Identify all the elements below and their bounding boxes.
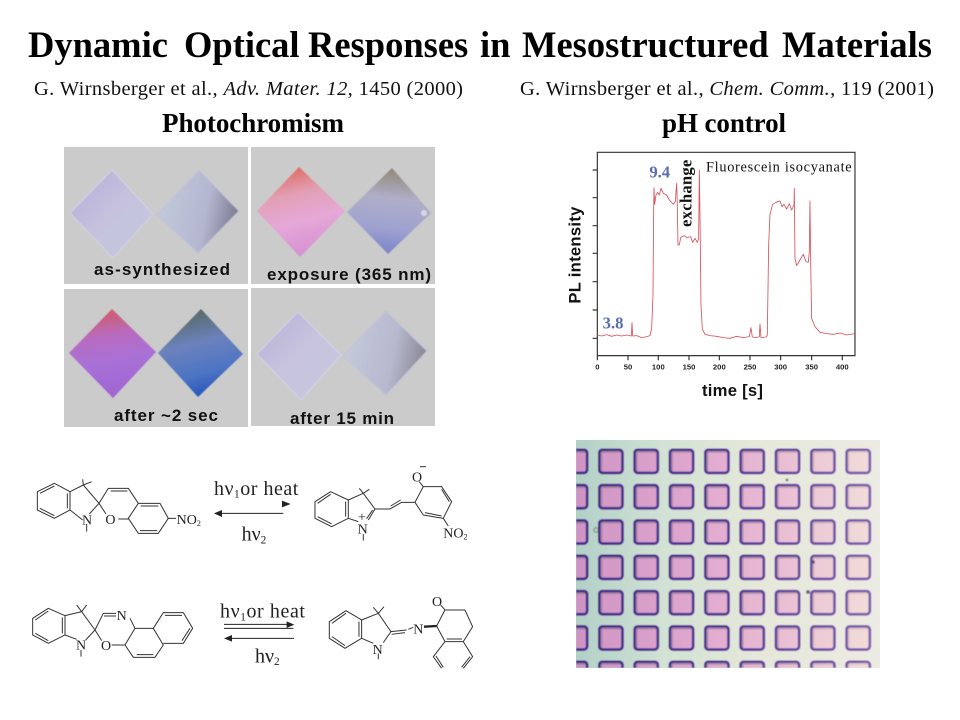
heading: Photochromism: Photochromism bbox=[162, 108, 344, 138]
panel: after 15 min bbox=[251, 288, 435, 428]
label: hv1 or heat: or heat bbox=[240, 478, 299, 500]
photo: patterned microscopy grid bbox=[570, 434, 886, 674]
title: Optical bbox=[184, 24, 300, 65]
annotation: exchange: exchange bbox=[677, 160, 696, 227]
molecule: spirooxazine: N bbox=[76, 638, 86, 653]
axis label: PL intensity: PL intensity bbox=[566, 206, 585, 304]
molecule: open form bbox=[329, 595, 473, 668]
tick labels: 150 bbox=[683, 362, 695, 371]
molecule: merocyanine: 2 bbox=[463, 532, 467, 541]
chemistry: reactions bbox=[33, 467, 473, 668]
arrows: reaction 2 bbox=[224, 621, 294, 642]
citation: Chem. Comm.: G. Wirnsberger et al., Chem. Comm., 119 (2001) bbox=[520, 78, 934, 100]
tick labels bbox=[595, 362, 849, 371]
tick labels: 50 bbox=[624, 362, 632, 371]
title: in bbox=[480, 24, 510, 65]
plot frame and ticks bbox=[593, 152, 855, 360]
arrows: reaction 1 bbox=[214, 501, 291, 517]
molecule: open form: O bbox=[432, 595, 442, 610]
title: Responses bbox=[308, 24, 468, 65]
tick labels: 200 bbox=[713, 362, 726, 371]
tick labels: 300 bbox=[774, 362, 787, 371]
tick labels: 400 bbox=[836, 362, 849, 371]
molecule: merocyanine: NO bbox=[443, 526, 463, 541]
molecule: merocyanine bbox=[315, 467, 467, 541]
PL trace bbox=[597, 170, 855, 338]
molecule: merocyanine: + bbox=[358, 510, 366, 525]
label: hv1 or heat: 1 bbox=[234, 489, 240, 501]
tick labels: 250 bbox=[744, 362, 756, 371]
molecule: open form: N bbox=[373, 643, 383, 658]
value label 3.8: 3.8 bbox=[603, 314, 623, 333]
molecule: open form: N bbox=[413, 622, 423, 637]
tick labels: 350 bbox=[805, 362, 818, 371]
molecule: spirooxazine: N bbox=[117, 609, 127, 624]
label: hv1 or heat (2): or heat bbox=[246, 601, 305, 623]
molecule: spiropyran: O bbox=[105, 513, 115, 528]
axis label: time: time [s] bbox=[702, 381, 763, 400]
label: hv1 or heat (2): hν bbox=[220, 601, 240, 623]
molecule: spirooxazine: O bbox=[101, 639, 111, 654]
panel: as-synthesized bbox=[64, 147, 248, 284]
title: Dynamic bbox=[28, 24, 168, 65]
tick labels: 0 bbox=[595, 362, 599, 371]
title: Materials bbox=[782, 24, 932, 65]
panel: after ~2 sec bbox=[64, 289, 248, 427]
panel: after 15 min: after 15 min bbox=[290, 409, 394, 428]
label: hv2 (2): hν bbox=[255, 645, 274, 667]
label: hv2 (2): 2 bbox=[274, 656, 280, 668]
molecule: merocyanine: O bbox=[412, 470, 422, 485]
heading: pH control: pH control bbox=[662, 108, 786, 138]
label: hv1 or heat (2): 1 bbox=[240, 611, 246, 623]
title: Mesostructured bbox=[522, 24, 769, 65]
annotation: Fluorescein isocyanate: Fluorescein isocyanate bbox=[706, 160, 852, 176]
molecule: spiropyran: NO bbox=[177, 513, 197, 528]
panel: exposure (365 nm): exposure (365 nm) bbox=[267, 265, 431, 284]
citation: Adv. Mater.: G. Wirnsberger et al., Adv. Mater. 12, 1450 (2000) bbox=[34, 78, 463, 100]
label: hv2: 2 bbox=[261, 534, 267, 546]
tick labels: 100 bbox=[652, 362, 665, 371]
molecule: spiropyran: N bbox=[82, 513, 92, 528]
molecule: merocyanine: N bbox=[358, 522, 368, 537]
panel: exposure (365 nm) bbox=[251, 147, 435, 284]
label: hv2: hν bbox=[242, 524, 261, 546]
molecule: spiropyran bbox=[37, 479, 201, 533]
panel: after ~2 sec: after ~2 sec bbox=[114, 406, 218, 425]
panel: as-synthesized: as-synthesized bbox=[94, 260, 230, 279]
molecule: spirooxazine bbox=[33, 605, 193, 657]
label: hv1 or heat: hν bbox=[214, 478, 234, 500]
value label 9.4: 9.4 bbox=[649, 162, 671, 181]
molecule: spiropyran: 2 bbox=[197, 519, 201, 528]
chart: PL intensity vs time bbox=[566, 152, 855, 400]
